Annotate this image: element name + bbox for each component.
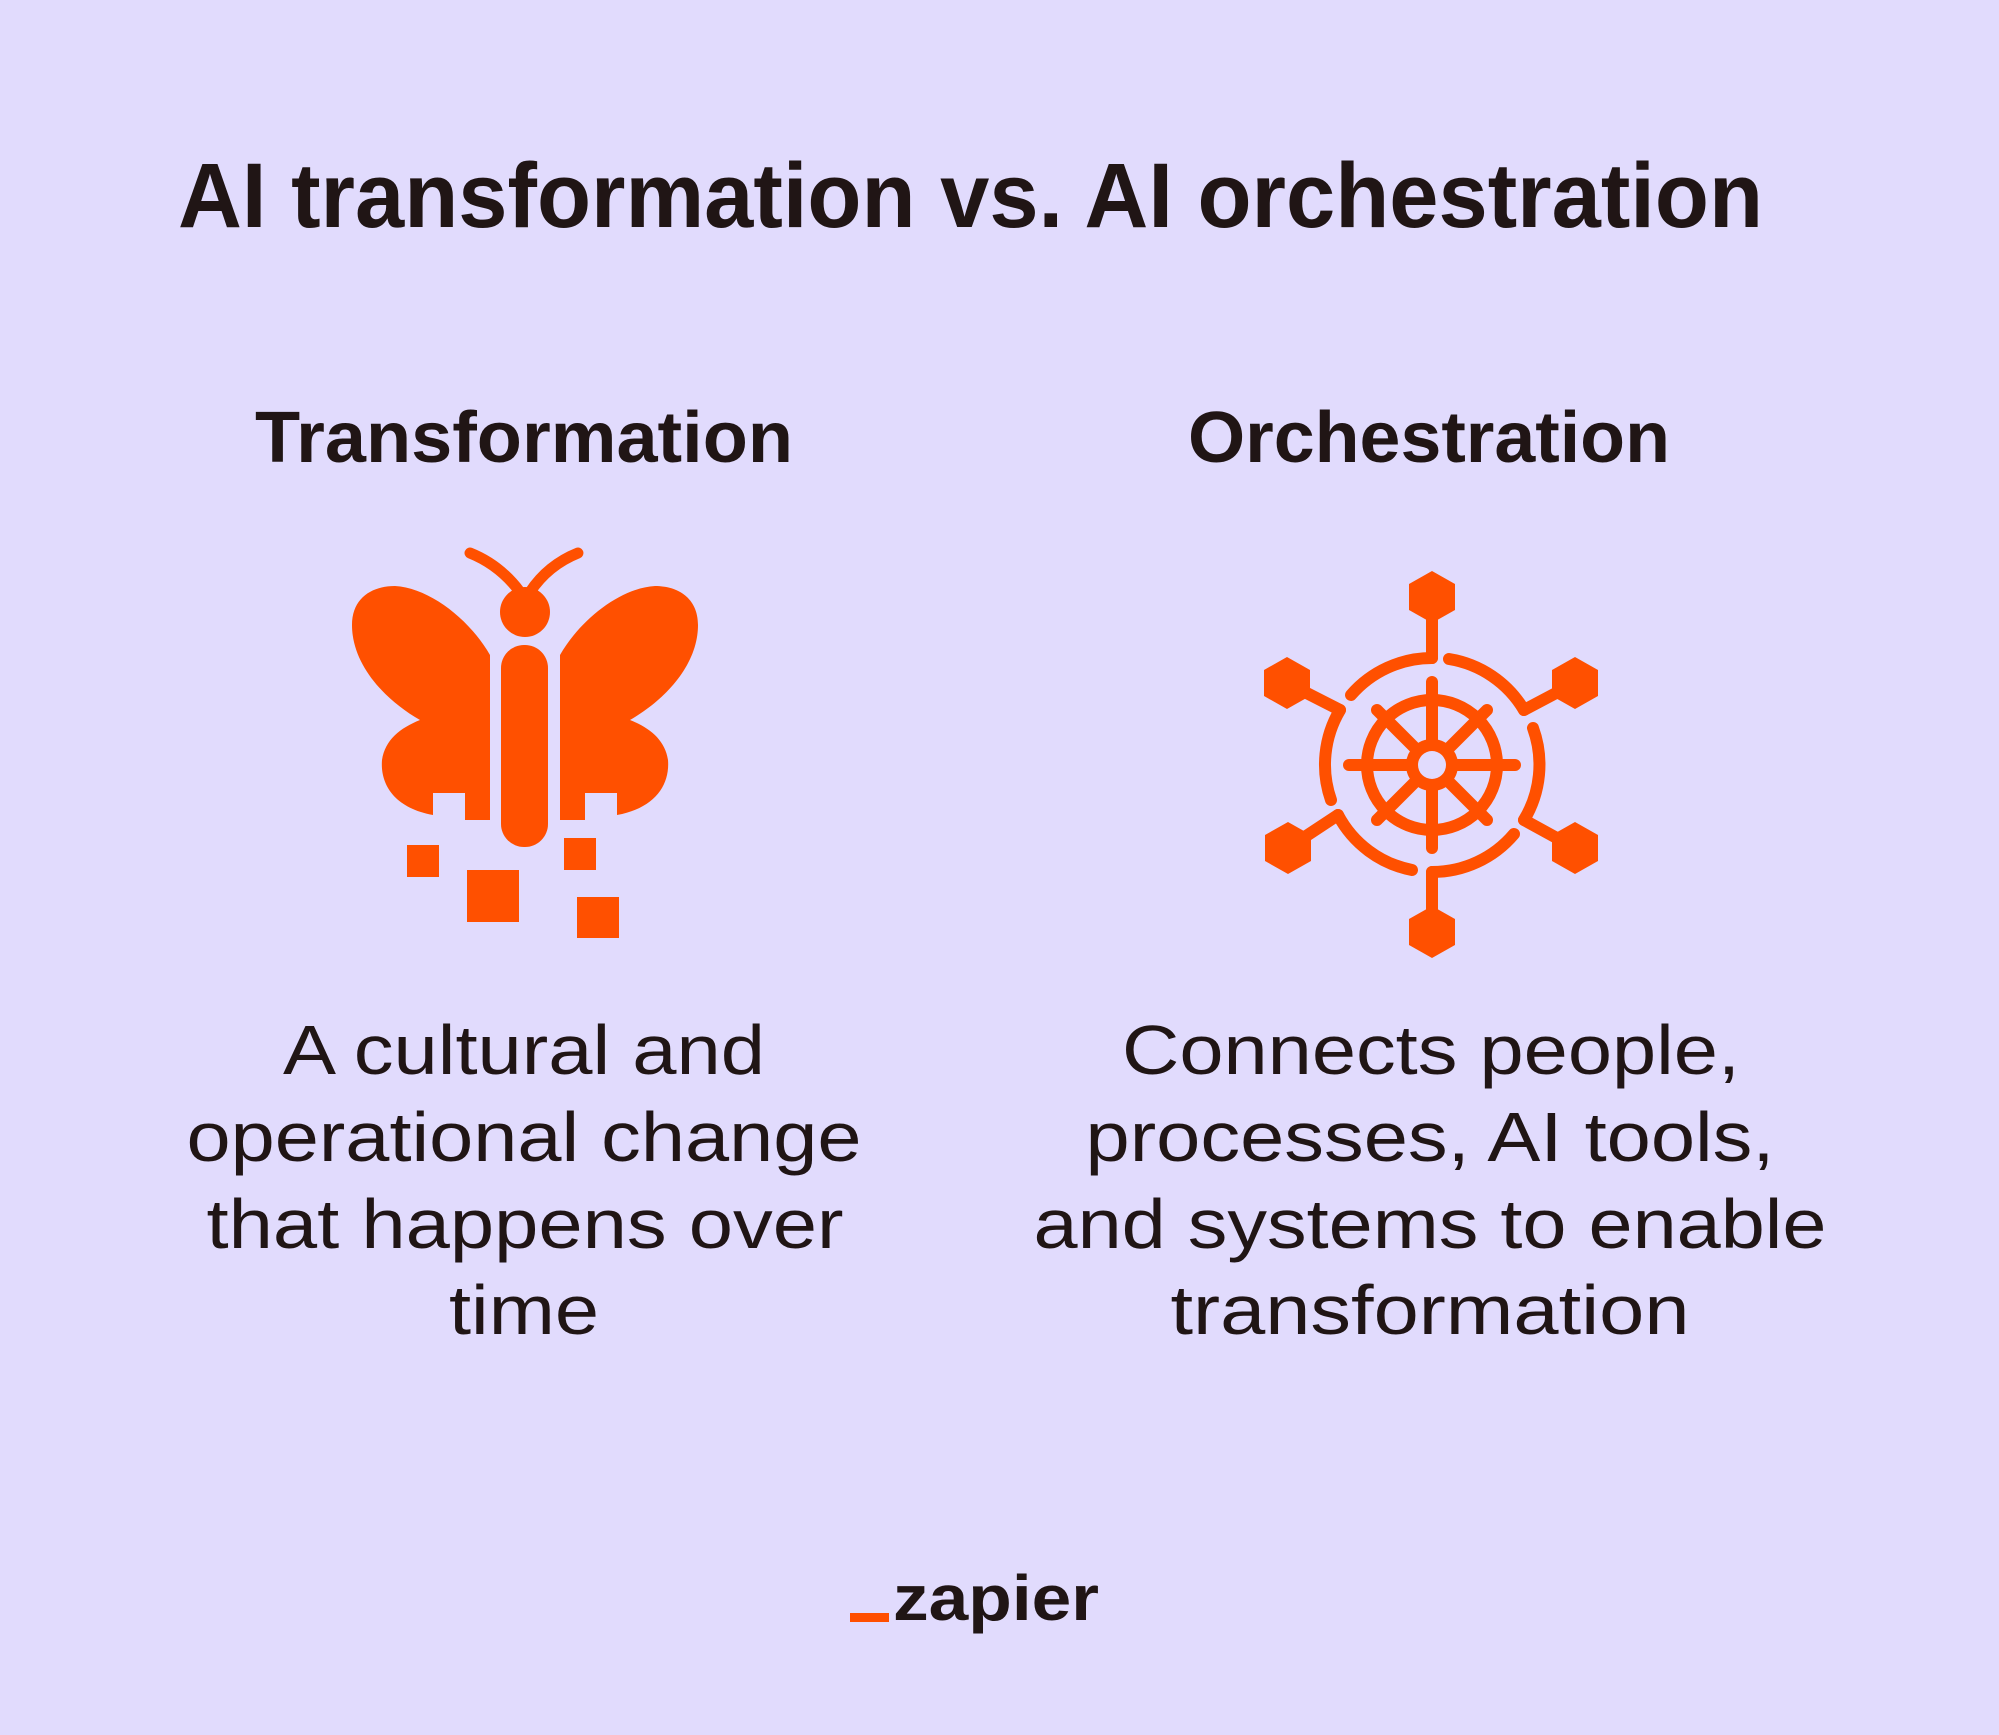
body text: transformation: A cultural and [283,1011,765,1089]
body text: orchestration: transformation [1170,1271,1690,1349]
icon: network wheel [1264,571,1598,958]
body text: orchestration: processes, AI tools, [1086,1098,1774,1176]
body text: transformation [186,1011,862,1349]
panel: transformation [186,398,862,1349]
heading: transformation: Transformation [255,398,793,478]
body text: transformation: that happens over [206,1185,844,1263]
heading: orchestration: Orchestration [1188,398,1670,478]
body text: transformation: operational change [186,1098,862,1176]
icon: butterfly [352,553,698,938]
panel: orchestration [1034,398,1826,1349]
body text: transformation: time [449,1271,599,1349]
body text: orchestration [1034,1011,1826,1349]
title: AI transformation vs. AI orchestration [178,145,1763,247]
body text: orchestration: and systems to enable [1034,1185,1826,1263]
logo: zapier: zapier [893,1562,1099,1634]
body text: orchestration: Connects people, [1122,1011,1740,1089]
